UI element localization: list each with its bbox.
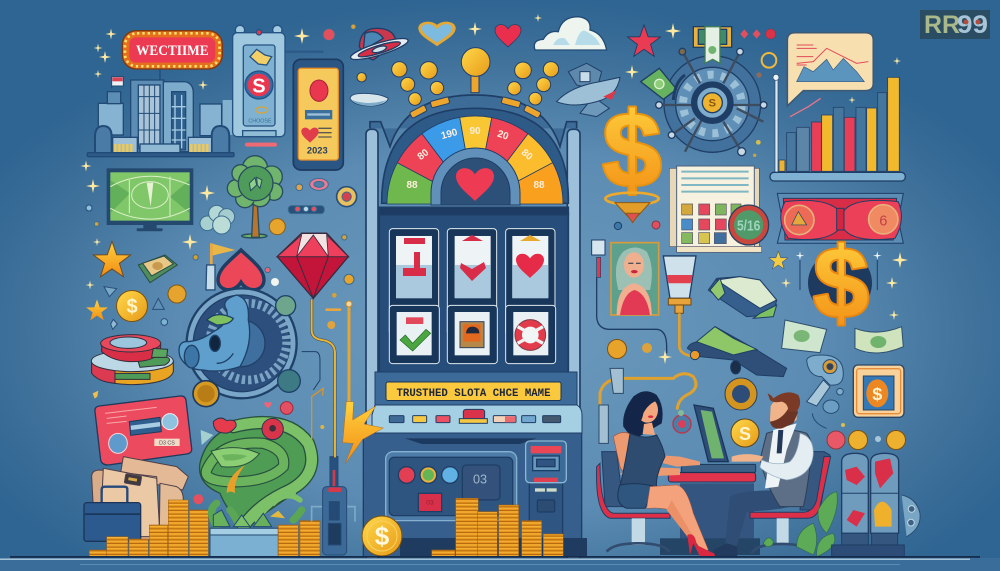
prize wheel: 90 bbox=[469, 126, 481, 137]
bow tie banner bbox=[777, 193, 903, 243]
ticket machine: S bbox=[252, 75, 266, 97]
airship bbox=[557, 63, 620, 117]
star: small orange bbox=[86, 300, 108, 320]
woman at desk bbox=[597, 391, 715, 557]
icon: red spade bbox=[218, 250, 264, 290]
coin: large dollar: $ bbox=[375, 521, 390, 551]
coin stacks: left bbox=[89, 500, 208, 557]
prize wheel: 190 bbox=[440, 127, 459, 142]
cars bbox=[687, 277, 787, 377]
watermark logo: RR bbox=[924, 11, 960, 39]
reels row 2 bbox=[389, 305, 556, 364]
big dollar sign: $ bbox=[603, 91, 661, 209]
portrait frame bbox=[611, 243, 659, 315]
machine base bbox=[400, 538, 587, 556]
cash bundle bbox=[138, 255, 177, 283]
dollar stand bbox=[605, 193, 659, 223]
robot arm bbox=[807, 355, 843, 428]
prize wheel: 88 bbox=[533, 180, 545, 191]
coin stacks: center left bbox=[278, 521, 320, 557]
control console: 03 bbox=[473, 472, 487, 486]
star: large gold bbox=[93, 242, 131, 277]
hose cable bbox=[599, 368, 696, 443]
phone: 2023 bbox=[307, 146, 328, 156]
prize wheel: 80 bbox=[416, 147, 432, 163]
framed coin card: $ bbox=[872, 384, 882, 404]
prize wheel: 88 bbox=[406, 180, 418, 191]
icon: red heart bbox=[495, 25, 521, 47]
phone bbox=[293, 59, 343, 170]
prize wheel: 20 bbox=[496, 129, 510, 143]
gold cable and rod bbox=[193, 293, 352, 504]
coins around desk: S bbox=[739, 424, 751, 444]
planter bbox=[210, 510, 278, 557]
bar chart bbox=[770, 74, 905, 181]
car upper bbox=[708, 277, 777, 318]
icon: star red bbox=[628, 25, 660, 56]
poker chip stack bbox=[91, 335, 173, 385]
lower body bbox=[363, 432, 582, 557]
control console: 03 bbox=[426, 500, 434, 507]
coin and gem tokens bbox=[93, 285, 186, 399]
bow tie banner: 6 bbox=[879, 214, 887, 230]
badge: 5/16 bbox=[737, 219, 760, 235]
cloud bbox=[534, 17, 607, 50]
roulette wheel with creature bbox=[179, 288, 320, 398]
suitcases bbox=[84, 457, 188, 541]
title panel bbox=[372, 372, 582, 433]
icon: outline heart bbox=[420, 23, 454, 44]
lightning bolt bbox=[343, 402, 383, 464]
flag and post bbox=[206, 243, 235, 290]
coin stacks: machine bbox=[432, 498, 563, 557]
saucer hat bbox=[349, 28, 410, 64]
red credit card bbox=[95, 396, 192, 465]
cash out unit bbox=[526, 441, 566, 538]
coin: large dollar bbox=[362, 516, 402, 556]
side bar with connector bbox=[592, 240, 667, 353]
icon: ruby gem bbox=[277, 233, 348, 298]
title panel: TRUSTHED SLOTA CHCE MAME bbox=[396, 388, 551, 400]
prize wheel: 80 bbox=[519, 147, 535, 163]
coin: dollar bbox=[116, 290, 148, 322]
big dollar in dark medallion: $ bbox=[813, 227, 869, 339]
red credit card: D3 CS bbox=[159, 441, 175, 447]
vault wheel: S bbox=[709, 98, 717, 110]
car lower bbox=[687, 327, 787, 377]
coins around desk bbox=[608, 340, 906, 450]
panel buttons bbox=[389, 409, 561, 423]
plant bbox=[763, 492, 837, 557]
bills bbox=[782, 320, 903, 353]
coin: dark medallion bbox=[193, 381, 219, 407]
reels row 1 bbox=[389, 229, 555, 335]
document with tiles bbox=[669, 166, 762, 252]
framed coin card bbox=[853, 365, 904, 417]
prize wheel bbox=[387, 116, 563, 204]
reel symbols bbox=[403, 235, 544, 281]
vault wheel bbox=[641, 27, 767, 156]
small gems and ring bbox=[614, 29, 776, 230]
sign: welcome marquee: WECTIIME bbox=[136, 43, 209, 59]
coin: dollar: $ bbox=[126, 296, 138, 318]
dispenser device bbox=[312, 457, 355, 555]
capsule bbox=[350, 93, 388, 106]
tree bbox=[227, 156, 283, 238]
ticket machine bbox=[233, 25, 323, 147]
man at desk bbox=[713, 392, 831, 556]
slot machine bbox=[362, 95, 587, 563]
machine frame and body bbox=[366, 95, 580, 563]
ticket machine: CHOOSE bbox=[248, 119, 272, 125]
building skyline bbox=[87, 69, 237, 157]
snake bbox=[200, 418, 313, 527]
glass vessel with connector bbox=[663, 256, 696, 357]
desk and monitor bbox=[660, 405, 760, 555]
control console bbox=[386, 452, 517, 521]
wheel hub with heart bbox=[431, 148, 520, 205]
watermark logo: 99 bbox=[957, 11, 988, 39]
speech bubble bbox=[787, 33, 873, 117]
money pile and small tokens bbox=[86, 24, 357, 286]
sign: welcome marquee bbox=[122, 31, 222, 69]
sparkles scattered bbox=[80, 14, 908, 364]
knob and bulbs bbox=[357, 48, 559, 119]
floor bbox=[0, 556, 1000, 571]
gumball display cases bbox=[832, 453, 920, 557]
badge bbox=[729, 205, 769, 245]
monitor bbox=[107, 168, 193, 231]
star and pins near medallion bbox=[769, 251, 882, 290]
watermark logo bbox=[920, 10, 990, 39]
